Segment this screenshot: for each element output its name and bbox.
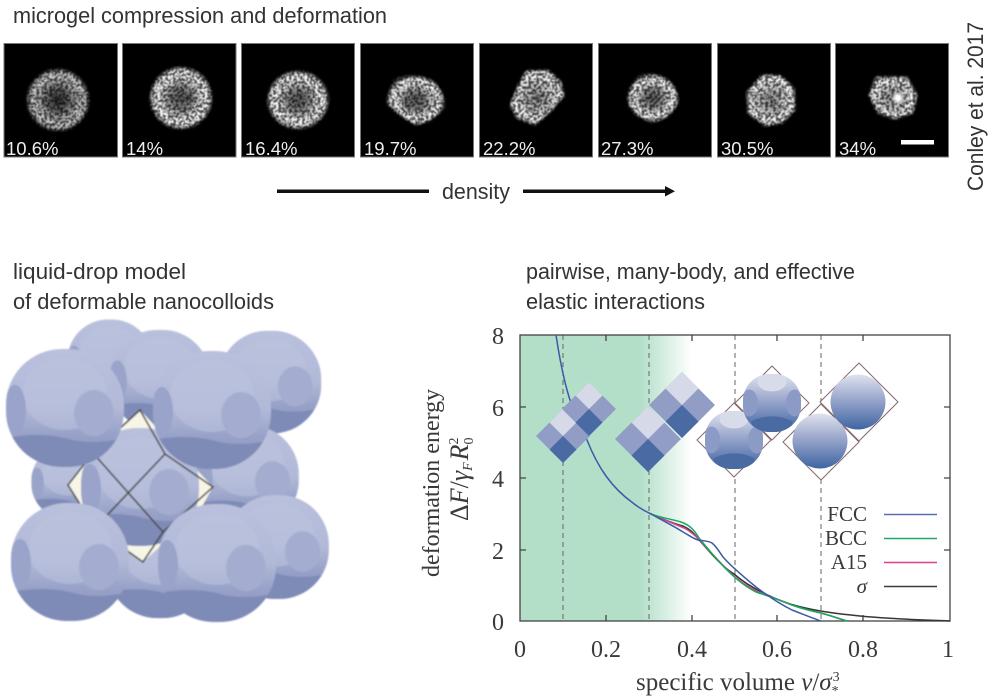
legend: FCC — [827, 502, 867, 526]
microgel image 19.7% — [360, 44, 474, 159]
deformation energy curves — [556, 335, 950, 621]
x-axis tick labels: 1 — [942, 637, 954, 663]
central sphere — [79, 428, 200, 547]
heading: pairwise interactions: elastic interactions — [526, 289, 705, 314]
y-axis tick labels: 0 — [492, 610, 504, 636]
microgel image 16.4%: 16.4% — [245, 138, 297, 159]
structure icons rounded — [697, 366, 809, 477]
microgel image 19.7%: 19.7% — [364, 138, 416, 159]
x-axis tick labels: 0.2 — [591, 637, 621, 663]
unit cell cream face — [68, 410, 213, 562]
microgel image 16.4% — [242, 44, 354, 159]
x-axis tick labels: 0.8 — [848, 637, 878, 663]
y-axis title — [419, 389, 477, 577]
x-axis title: specific volume v/σ — [636, 669, 832, 696]
microgel image 27.3%: 27.3% — [601, 138, 653, 159]
heading: liquid-drop model: of deformable nanocolloids — [13, 289, 274, 314]
y-axis title: ΔF/γ — [445, 471, 474, 521]
y-axis tick labels: 6 — [492, 396, 504, 422]
x-axis title: 3 — [833, 670, 840, 685]
x-axis tick labels: 0.4 — [677, 637, 707, 663]
y-axis title: deformation energy — [419, 389, 445, 577]
density arrow — [277, 179, 675, 204]
microgel image 22.2% — [480, 44, 592, 159]
density arrow: density — [442, 179, 510, 204]
green shaded region — [520, 335, 692, 621]
microgel image 10.6% — [4, 44, 118, 159]
microgel image 22.2%: 22.2% — [483, 138, 535, 159]
unit cell lines — [68, 410, 213, 562]
legend: A15 — [831, 550, 867, 574]
illustration: liquid-drop sphere packing — [4, 320, 330, 623]
microgel image 14%: 14% — [126, 138, 163, 159]
legend: BCC — [825, 526, 867, 550]
panel: microgel image strip — [4, 44, 948, 159]
microgel image 10.6%: 10.6% — [6, 138, 58, 159]
scale bar — [901, 140, 934, 144]
title: microgel compression and deformation: microgel compression and deformation — [13, 3, 387, 28]
y-axis title: 0 — [462, 437, 477, 444]
microgel image 34% — [836, 44, 948, 159]
y-axis tick labels: 4 — [492, 467, 504, 493]
chart: deformation energy vs specific volume — [419, 324, 954, 699]
microgel image 34%: 34% — [839, 138, 876, 159]
x-axis tick labels: 0.6 — [762, 637, 792, 663]
heading: liquid-drop model: liquid-drop model — [13, 259, 186, 284]
heading: pairwise interactions: pairwise, many-body, and effective — [526, 259, 855, 284]
microgel image 30.5%: 30.5% — [721, 138, 773, 159]
axes frame and ticks — [520, 335, 950, 621]
structure icons spheres — [783, 363, 898, 480]
x-axis tick labels: 0 — [514, 637, 526, 663]
legend — [825, 502, 937, 598]
y-axis tick labels — [492, 324, 504, 636]
y-axis title: R — [445, 444, 474, 461]
y-axis tick labels: 2 — [492, 539, 504, 565]
citation: Conley et al. 2017: Conley et al. 2017 — [963, 22, 988, 191]
microgel image 30.5% — [718, 44, 830, 159]
microgel image 27.3% — [598, 44, 712, 159]
y-axis title: F — [461, 462, 476, 472]
x-axis tick labels — [514, 637, 954, 663]
legend: σ — [857, 574, 869, 598]
structure icons FCC-like tiles — [536, 372, 715, 472]
microgel image 14% — [122, 44, 236, 159]
x-axis title: * — [832, 684, 839, 699]
y-axis tick labels: 8 — [492, 324, 504, 350]
y-axis title: 2 — [447, 437, 462, 444]
